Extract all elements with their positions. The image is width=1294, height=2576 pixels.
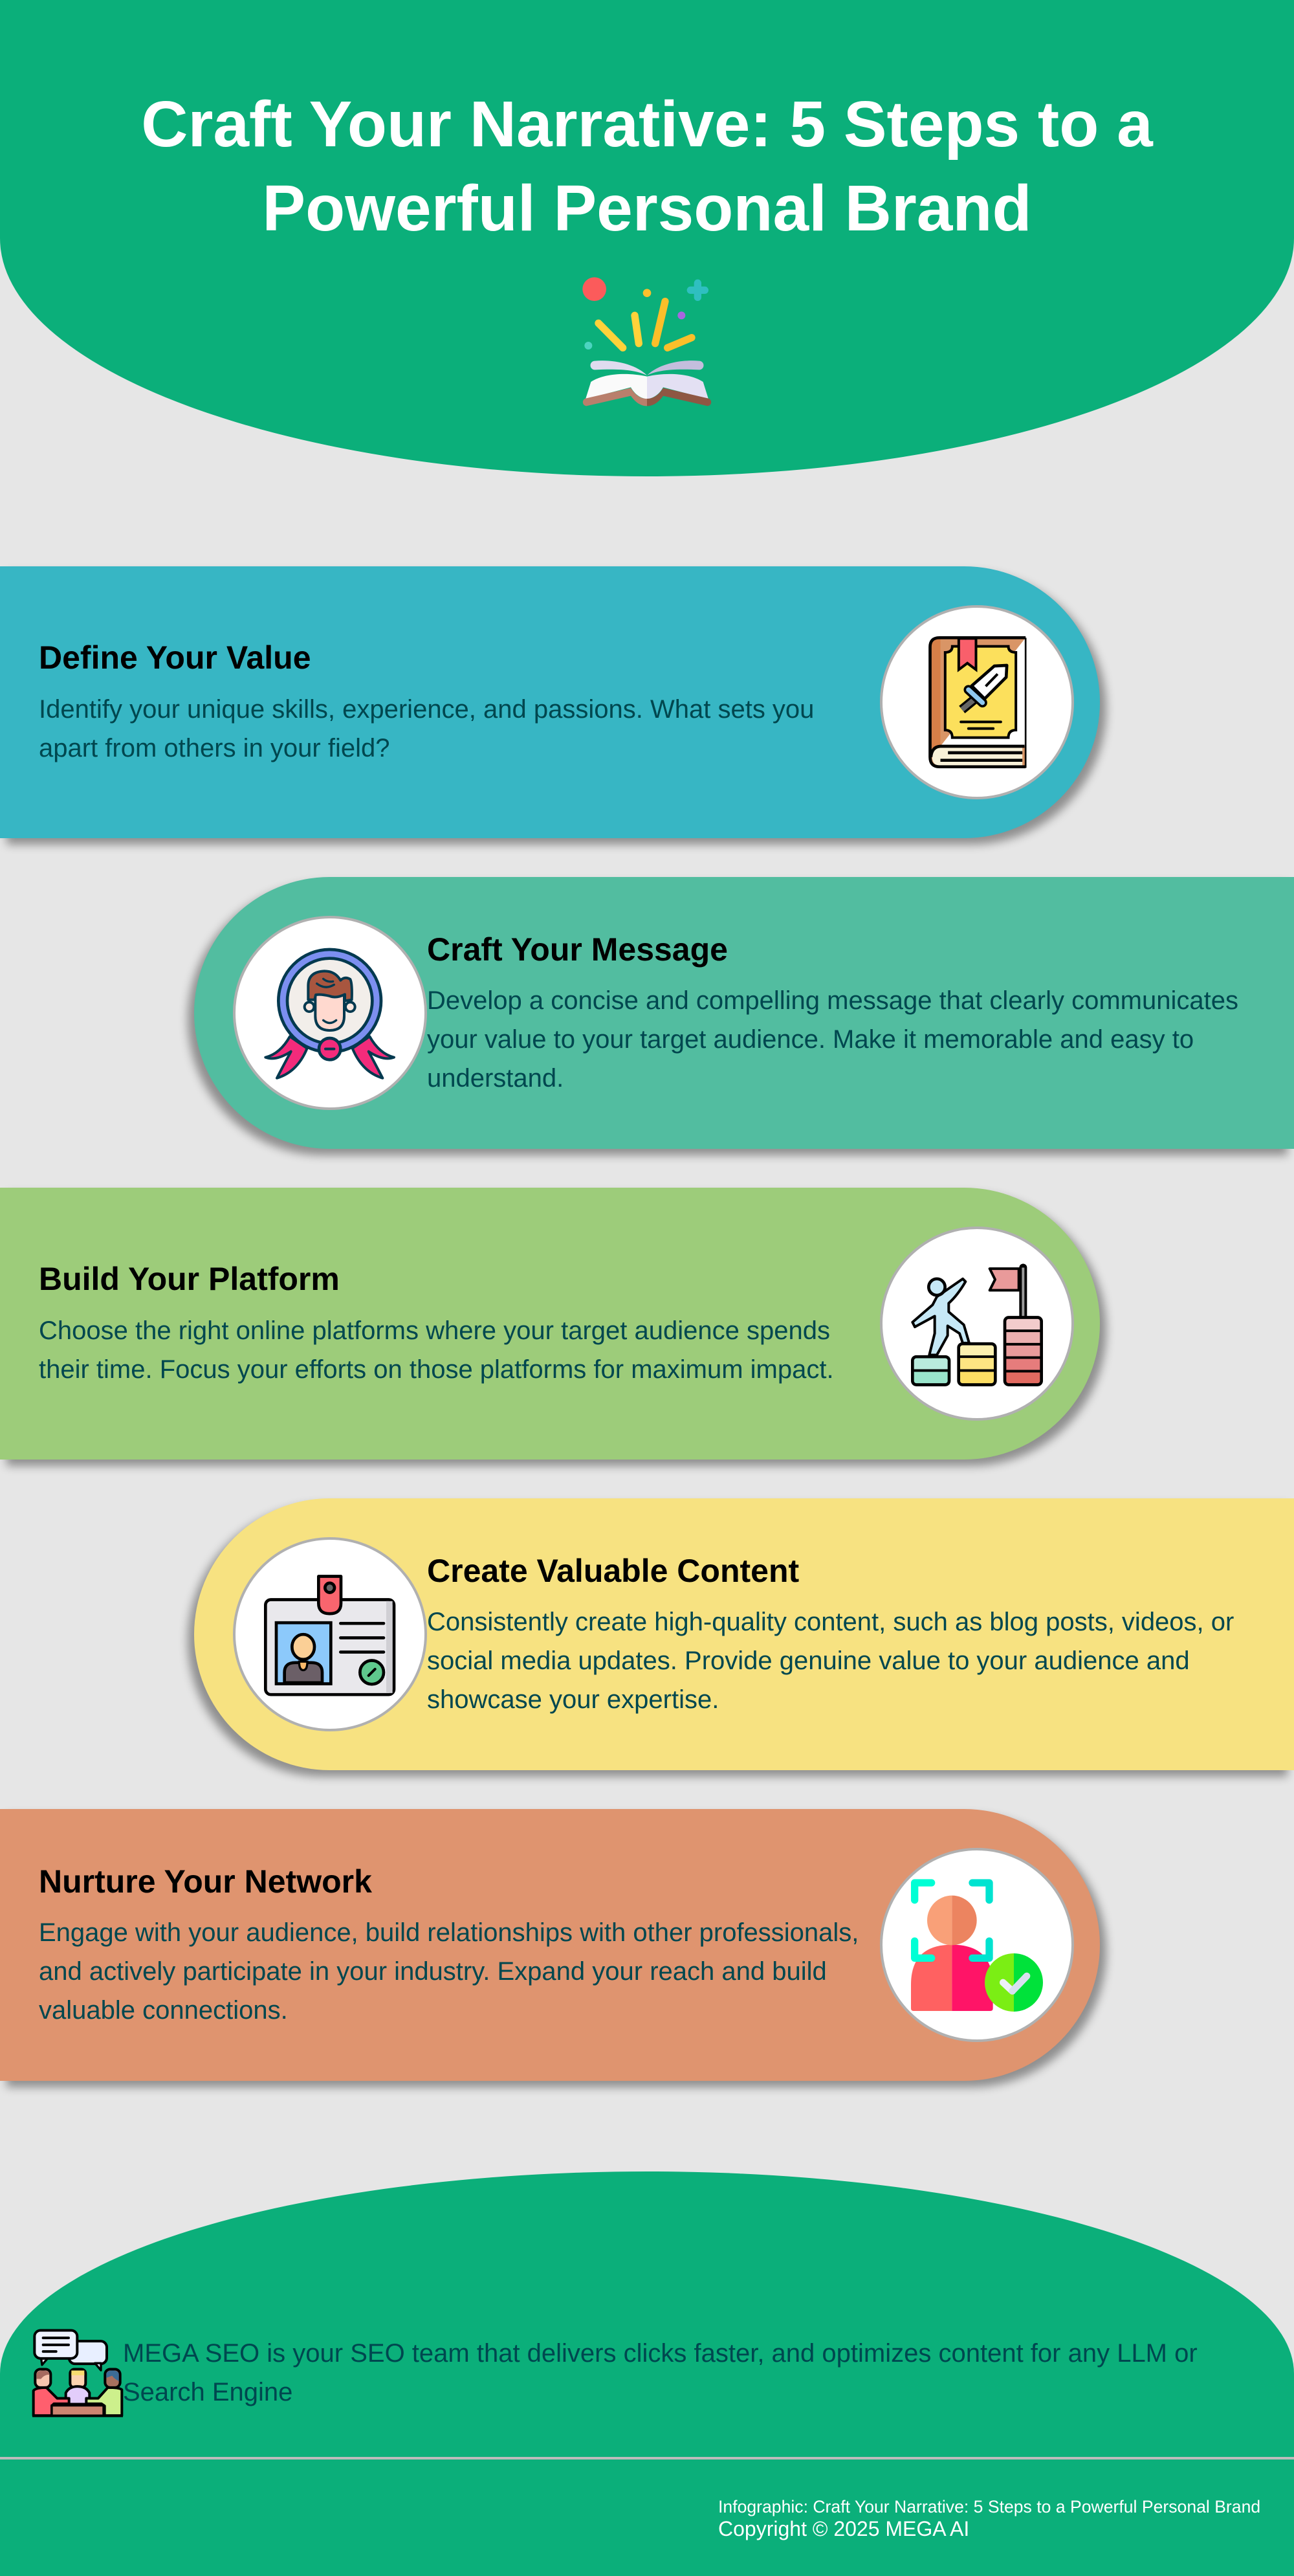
text: about mega seo — [123, 2339, 1198, 2406]
text: craft your message: your value to your target audience. Make it memorable and easy to — [427, 1025, 1194, 1054]
icon circle: book with sword — [880, 605, 1074, 799]
heading: nurture your network: Nurture Your Network — [39, 1863, 372, 1900]
icon circle: medal with person — [233, 916, 427, 1110]
icon: open book with sparks — [582, 277, 712, 406]
panel: step 3 build your platform — [0, 1188, 1100, 1460]
icon circle: climbing steps to flag — [880, 1227, 1074, 1421]
text: nurture your network: and actively participate in your industry. Expand your reach and build — [39, 1957, 827, 1986]
icon circle: id card — [233, 1537, 427, 1731]
text: define your value: apart from others in your field? — [39, 734, 389, 762]
copyright: Copyright © 2025 MEGA AI — [718, 2517, 969, 2540]
text: nurture your network: Engage with your audience, build relationships with other professionals, — [39, 1918, 859, 1947]
panel: step 2 craft your message — [194, 877, 1294, 1149]
text: nurture your network — [39, 1918, 859, 2025]
text: build your platform: Choose the right online platforms where your target audience spends — [39, 1316, 830, 1345]
text: craft your message — [427, 986, 1238, 1093]
text: create valuable content: showcase your expertise. — [427, 1685, 719, 1714]
heading: build your platform: Build Your Platform — [39, 1261, 340, 1297]
text: create valuable content — [427, 1608, 1234, 1714]
text: build your platform: their time. Focus your efforts on those platforms for maximum impact. — [39, 1355, 834, 1384]
title: Powerful Personal Brand — [262, 172, 1032, 245]
infographic caption: Infographic: Craft Your Narrative: 5 Steps to a Powerful Personal Brand — [718, 2497, 1260, 2516]
text: about mega seo: MEGA SEO is your SEO team that delivers clicks faster, and optimizes content for any LLM or — [123, 2339, 1198, 2368]
text: define your value — [39, 695, 814, 762]
text: craft your message: Develop a concise and compelling message that clearly communicates — [427, 986, 1238, 1015]
text: craft your message: understand. — [427, 1064, 564, 1093]
icon circle: verified person — [880, 1848, 1074, 2042]
panel: step 4 create valuable content — [194, 1498, 1294, 1770]
panel: step 5 nurture your network — [0, 1809, 1100, 2081]
heading: create valuable content: Create Valuable Content — [427, 1553, 799, 1589]
panel: step 1 define your value — [0, 566, 1100, 838]
heading: craft your message: Craft Your Message — [427, 931, 728, 968]
text: create valuable content: Consistently create high-quality content, such as blog posts, videos, or — [427, 1608, 1234, 1636]
footer band — [0, 2171, 1294, 2576]
text: nurture your network: valuable connections. — [39, 1996, 288, 2025]
header banner — [0, 0, 1294, 476]
footer credits — [718, 2497, 1260, 2540]
text: about mega seo: Search Engine — [123, 2378, 292, 2406]
title — [141, 88, 1153, 245]
text: create valuable content: social media updates. Provide genuine value to your audience and — [427, 1647, 1190, 1675]
title: Craft Your Narrative: 5 Steps to a — [141, 88, 1153, 161]
heading: define your value: Define Your Value — [39, 639, 311, 676]
divider line — [0, 2457, 1294, 2459]
text: build your platform — [39, 1316, 834, 1384]
icon: team meeting — [32, 2329, 123, 2417]
text: define your value: Identify your unique skills, experience, and passions. What sets you — [39, 695, 814, 724]
